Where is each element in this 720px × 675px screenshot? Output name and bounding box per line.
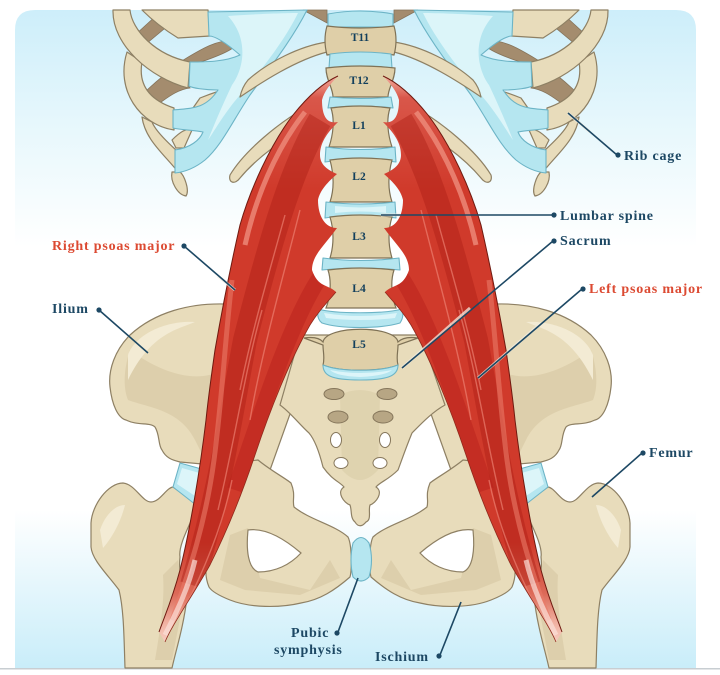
label: Ilium: Ilium (52, 302, 89, 317)
label: Right psoas major (52, 239, 235, 290)
label: Ischium: Ischium (375, 650, 429, 665)
label: Sacrum: Sacrum (560, 234, 611, 249)
label: Femur: Femur (649, 446, 693, 461)
vertebra labels: T11 (351, 32, 370, 44)
rib cage left (113, 10, 327, 196)
label: Pubic symphysis: symphysis (274, 643, 343, 658)
label: Ilium (52, 302, 148, 353)
label: Rib cage (568, 113, 682, 164)
vertebra labels: L1 (352, 120, 366, 132)
vertebra labels: L3 (352, 231, 366, 243)
rib cage right (394, 10, 608, 196)
vertebra labels: L5 (352, 339, 366, 351)
right psoas major muscle (150, 70, 345, 650)
label: Femur (592, 446, 693, 497)
spine (304, 11, 418, 380)
vertebra labels: L2 (352, 171, 366, 183)
sacrum (280, 335, 445, 526)
label: Left psoas major (478, 282, 703, 378)
hip bone and femur right (370, 304, 630, 668)
hip bone and femur left (91, 304, 351, 668)
pubic symphysis disc (351, 538, 372, 581)
left psoas major muscle (376, 70, 571, 650)
label: Lumbar spine: Lumbar spine (560, 209, 654, 224)
label: Pubic symphysis: Pubic (291, 626, 329, 641)
vertebra labels: T12 (349, 75, 369, 87)
label: Rib cage: Rib cage (624, 149, 682, 164)
label: Ischium (375, 602, 461, 665)
label: Lumbar spine (381, 209, 654, 224)
label: Pubic symphysis (274, 578, 358, 658)
vertebra labels: L4 (352, 283, 366, 295)
label: Sacrum (402, 234, 611, 368)
vertebra labels (349, 32, 370, 351)
label: Left psoas major: Left psoas major (589, 282, 703, 297)
label: Right psoas major: Right psoas major (52, 239, 175, 254)
